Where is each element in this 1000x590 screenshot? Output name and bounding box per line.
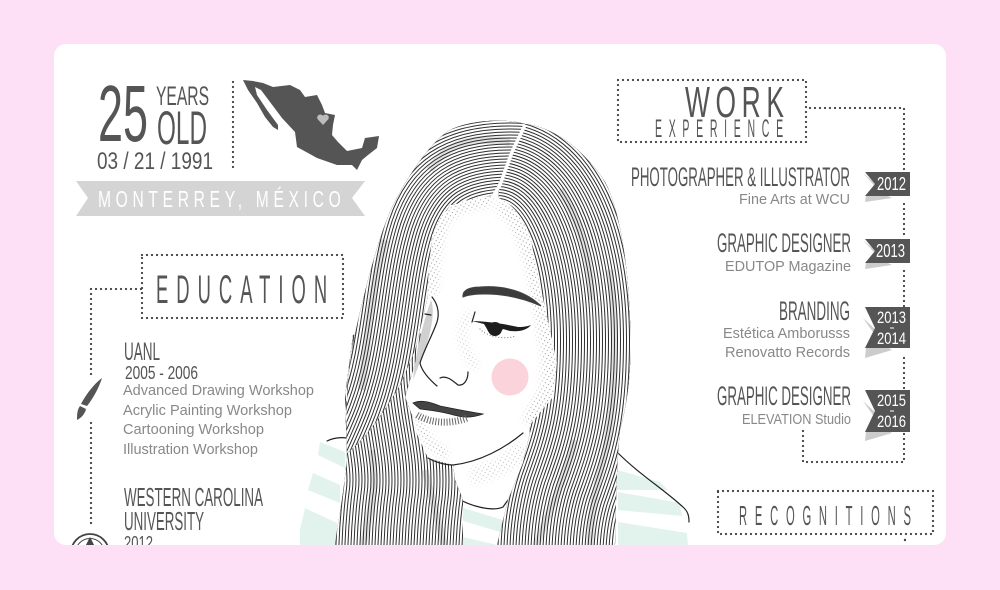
jaw line <box>428 433 523 465</box>
lips <box>413 401 483 422</box>
work experience heading <box>618 77 806 144</box>
work connector <box>803 108 904 462</box>
upper left hair <box>340 140 525 470</box>
job: graphic designer, Edutop: EDUTOP Magazine <box>725 259 851 275</box>
job: branding <box>723 296 850 361</box>
year tag 2013: 2013 <box>876 241 905 261</box>
job: photographer <box>631 162 850 208</box>
year tag 2015-2016 <box>863 390 910 441</box>
resume infographic: GRAPHIC DESIGNER <box>717 381 851 411</box>
ear <box>420 297 438 363</box>
job: photographer: Fine Arts at WCU <box>739 192 850 208</box>
job: graphic designer, Elevation: ELEVATION Studio <box>742 412 851 428</box>
job: graphic designer, Elevation <box>717 381 851 428</box>
year tag 2015-2016: 2015 <box>877 391 906 410</box>
year tag 2013-2014: 2014 <box>877 329 906 348</box>
age number: 25 <box>98 69 148 158</box>
year tag 2012: 2012 <box>877 174 906 194</box>
education entry: UANL: UANL <box>124 338 160 366</box>
year tag 2013-2014: 2013 <box>877 308 906 327</box>
year tag 2013-2014 <box>863 307 910 358</box>
education entry: UANL <box>123 338 314 458</box>
far cheek shading <box>413 300 433 380</box>
age block <box>97 69 213 175</box>
location ribbon <box>76 181 365 216</box>
eyebrow <box>463 287 541 306</box>
blush <box>492 358 528 396</box>
resume infographic: GRAPHIC DESIGNER <box>717 228 851 258</box>
education connector <box>91 289 141 528</box>
education entry: Western Carolina: UNIVERSITY <box>124 506 204 536</box>
icon: paintbrush <box>77 378 102 420</box>
job: graphic designer, Edutop <box>717 228 851 275</box>
birth date: 03 / 21 / 1991 <box>97 148 213 175</box>
education entry: UANL: Advanced Drawing Workshop <box>123 382 314 399</box>
year tag 2012 <box>863 172 910 202</box>
resume infographic: BRANDING <box>779 296 850 326</box>
portrait illustration <box>300 125 689 570</box>
shoulders and collar lines <box>327 438 689 522</box>
education entry: Western Carolina <box>124 488 263 545</box>
education entry: UANL: Illustration Workshop <box>123 441 258 458</box>
lower left hair <box>362 330 445 570</box>
education heading <box>142 255 343 318</box>
education entry: UANL: Acrylic Painting Workshop <box>123 402 292 419</box>
education entry: Western Carolina: 2012 <box>124 533 153 553</box>
job: branding: Estética Amborusss <box>723 326 850 342</box>
education heading: EDUCATION <box>156 267 327 312</box>
card <box>54 44 946 545</box>
work experience heading: WORK <box>685 77 784 127</box>
work experience heading: EXPERIENCE <box>655 116 783 144</box>
skin stippling <box>414 196 557 487</box>
icon: compass <box>72 533 108 545</box>
recognitions heading: RECOGNITIONS <box>739 500 911 532</box>
eye <box>472 312 531 338</box>
recognitions connector <box>904 539 906 541</box>
years label: YEARS <box>156 81 209 111</box>
location ribbon: MONTERREY, MÉXICO <box>98 186 341 213</box>
shirt stripes <box>300 442 688 546</box>
resume infographic <box>54 44 946 545</box>
age divider <box>232 82 234 170</box>
old label: OLD <box>157 101 207 154</box>
job: branding: Renovatto Records <box>725 345 850 361</box>
year tag 2013 <box>863 239 910 269</box>
icon: map of Mexico <box>243 80 379 170</box>
nose <box>420 363 468 386</box>
hair part <box>492 125 525 198</box>
face <box>409 196 557 465</box>
right hair <box>500 158 614 570</box>
year tag 2015-2016: 2016 <box>877 412 906 431</box>
education entry: UANL: 2005 - 2006 <box>125 363 198 383</box>
education entry: UANL: Cartooning Workshop <box>123 421 264 438</box>
education entry: Western Carolina: WESTERN CAROLINA <box>124 482 263 512</box>
recognitions heading <box>718 491 933 534</box>
